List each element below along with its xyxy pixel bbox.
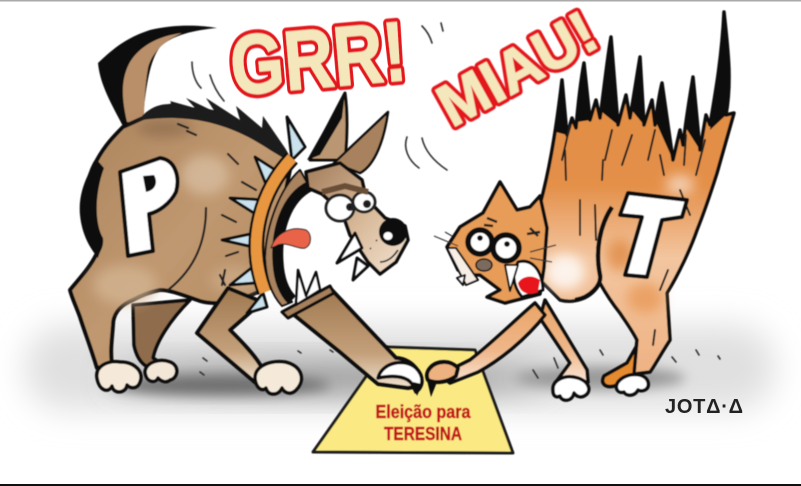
dog back fur — [142, 98, 295, 165]
cat — [427, 12, 734, 400]
motion lines — [192, 23, 720, 378]
mat label — [376, 401, 471, 444]
dog spikes — [222, 117, 305, 313]
MIAU exclamation: MIAU! — [426, 0, 608, 139]
mat label: Eleição para — [376, 401, 471, 422]
cat fur tips — [556, 12, 729, 160]
dog eyes — [322, 186, 375, 221]
cat haunch line — [575, 207, 612, 300]
dog body — [70, 98, 295, 368]
dog extended front leg — [293, 288, 422, 396]
dog far hind leg — [133, 300, 190, 382]
election mat — [313, 347, 513, 453]
cat front leg — [540, 300, 589, 400]
dog near hind paw — [97, 362, 141, 392]
dog head band and jaw — [265, 170, 334, 318]
GRR exclamation: GRR! — [226, 4, 410, 114]
GRR exclamation: GRR! — [226, 4, 410, 114]
cat body and bristling fur — [520, 12, 734, 374]
letter P — [120, 158, 177, 256]
cat hind paw — [616, 374, 648, 395]
cat eyes — [468, 230, 492, 254]
dog tail — [98, 26, 217, 128]
cat head — [434, 182, 556, 303]
cat mouth — [514, 261, 543, 297]
mat label: TERESINA — [384, 423, 462, 444]
dog tongue — [271, 229, 310, 248]
dog snout — [306, 163, 408, 280]
dog front near leg — [197, 288, 301, 394]
dog spiked collar — [256, 158, 292, 292]
cat extended arm — [427, 303, 545, 397]
MIAU exclamation: MIAU! — [426, 0, 608, 139]
signature: JOTΔ·Δ — [665, 396, 743, 418]
dog — [70, 26, 422, 396]
dog rump fur — [80, 160, 104, 258]
letter T — [620, 193, 687, 277]
dog nose — [379, 218, 407, 246]
dog body fur lines — [168, 124, 256, 290]
cat whiskers — [434, 232, 556, 262]
cat far hind leg — [603, 340, 648, 387]
cat nose — [476, 259, 492, 271]
dog ears — [307, 93, 388, 173]
